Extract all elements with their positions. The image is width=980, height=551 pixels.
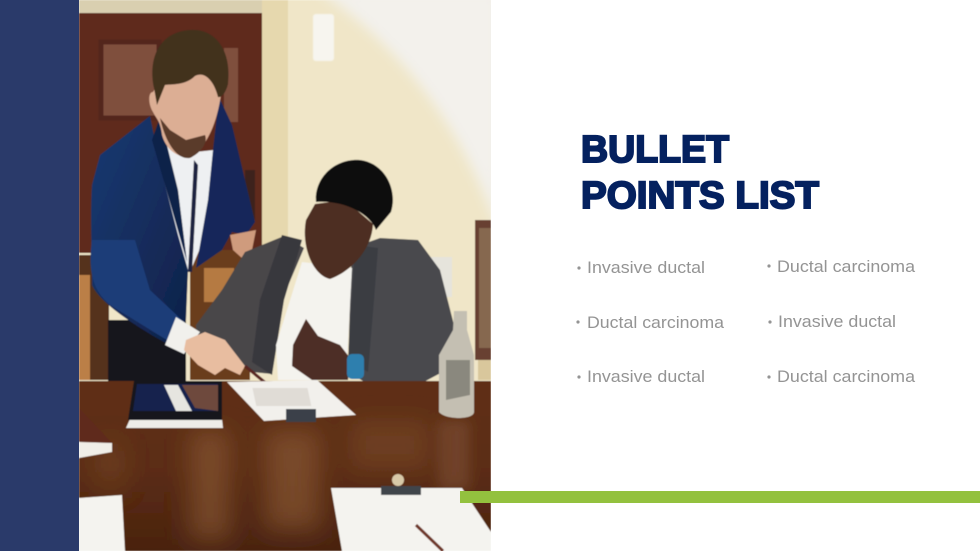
item: left row 3: Invasive ductal [587, 367, 705, 386]
standing man head [149, 72, 221, 157]
item: left row 1: Invasive ductal [587, 258, 705, 277]
seated man t-shirt [276, 262, 352, 380]
table reflections [95, 420, 430, 540]
left navy panel [0, 0, 79, 551]
wall lamp [313, 14, 334, 61]
green accent bar [460, 491, 980, 503]
title [581, 129, 819, 217]
paper bottom-right [331, 488, 491, 551]
item: left row 2: Ductal carcinoma [587, 313, 725, 332]
item: right row 2: Invasive ductal [778, 312, 896, 331]
standing man hand on shoulder [230, 230, 256, 259]
standing man hair [152, 30, 229, 105]
water bottle [439, 311, 474, 418]
clipboard paper [227, 380, 356, 421]
ceiling [79, 0, 274, 13]
seated man hair [316, 160, 393, 230]
wall plate [430, 257, 452, 297]
tablet [126, 381, 223, 428]
wristwatch [347, 354, 364, 379]
standing man jacket [91, 116, 188, 345]
wall [79, 0, 491, 400]
paper bottom-left [79, 495, 125, 551]
table [79, 381, 491, 551]
chair backs [79, 255, 109, 380]
bottom clip [381, 486, 421, 495]
right chair [475, 220, 491, 360]
photo: two men reviewing documents at a table [79, 0, 500, 551]
seated man jacket [196, 236, 304, 374]
pillar [262, 0, 288, 250]
standing man cuff [165, 317, 200, 354]
title: POINTS LIST [581, 175, 819, 217]
standing man pointing hand [184, 332, 245, 375]
title: BULLET [581, 129, 729, 171]
seated man hand [292, 319, 350, 380]
bullet list [576, 257, 916, 386]
standing man sleeve [91, 240, 184, 342]
door [79, 13, 262, 253]
standing man shirt [163, 146, 214, 270]
item: right row 1: Ductal carcinoma [777, 257, 916, 276]
pen [244, 365, 266, 382]
white curved vault [327, 0, 491, 228]
item: right row 3: Ductal carcinoma [777, 367, 916, 386]
seated man head [305, 200, 373, 279]
bottom pen [416, 525, 443, 551]
clipboard clip [286, 409, 316, 422]
standing man trousers [108, 320, 186, 382]
book at left edge [90, 441, 109, 442]
